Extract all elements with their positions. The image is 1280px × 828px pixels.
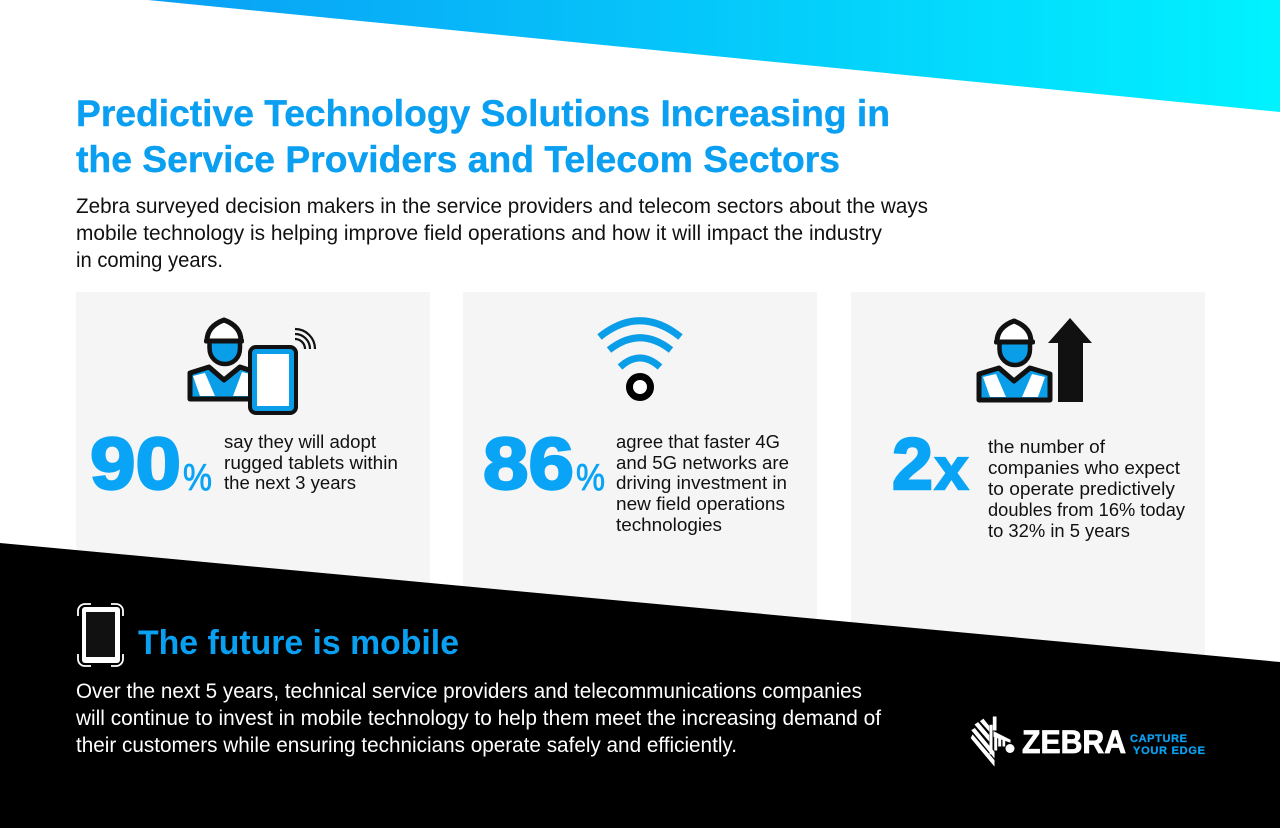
text: faster networks: and 5G networks are: [616, 452, 789, 473]
icon: mobile tablet: [78, 604, 123, 666]
text: adopt rugged tablets: [224, 431, 398, 493]
text: adopt rugged tablets: rugged tablets within: [224, 452, 398, 473]
panel: rugged tablets: [76, 292, 430, 592]
icon: worker with tablet: [190, 320, 315, 413]
title: the Service Providers and Telecom Sectors: [76, 139, 840, 180]
text: predictive doubling: the number of: [988, 436, 1106, 457]
intro paragraph: mobile technology is helping improve field operations and how it will impact the industry: [76, 222, 882, 245]
title: Predictive Technology Solutions Increasing in: [76, 93, 890, 134]
icon: wifi signal: [600, 321, 680, 398]
stat: 86%: 86: [483, 424, 574, 505]
text: faster networks: technologies: [616, 514, 722, 535]
closing paragraph: Over the next 5 years, technical service providers and telecommunications companies: [76, 680, 862, 703]
title: [76, 93, 890, 180]
text: predictive doubling: to 32% in 5 years: [988, 520, 1130, 541]
panel: 4G and 5G networks: [463, 292, 817, 632]
closing paragraph: [75, 680, 881, 757]
stat: 90%: 90: [90, 424, 181, 505]
stat: 86%: [483, 424, 605, 505]
text: predictive doubling: doubles from 16% today: [988, 499, 1186, 520]
stat: 90%: %: [183, 457, 212, 499]
intro paragraph: Zebra surveyed decision makers in the service providers and telecom sectors about the ways: [76, 195, 928, 218]
text: faster networks: new field operations: [616, 493, 785, 514]
intro paragraph: [76, 195, 928, 272]
logo wordmark: ZEBRA: [1022, 724, 1126, 760]
closing paragraph: will continue to invest in mobile technology to help them meet the increasing demand of: [75, 707, 881, 730]
heading: the future is mobile: The future is mobile: [138, 624, 459, 662]
zebra logo: [971, 717, 1205, 765]
icon: worker with up arrow: [979, 318, 1092, 402]
top gradient banner: [148, 0, 1280, 112]
stat: 86%: %: [576, 457, 605, 499]
stat: 2x: 2: [892, 424, 933, 505]
logo tagline: YOUR EDGE: [1133, 745, 1205, 757]
text: adopt rugged tablets: the next 3 years: [224, 472, 356, 493]
icon: zebra head mark: [971, 717, 1010, 765]
panel: operating predictively: [851, 292, 1205, 672]
text: adopt rugged tablets: say they will adopt: [224, 431, 376, 452]
black footer band: [0, 543, 1280, 828]
logo dot: [1006, 744, 1014, 753]
stat: 2x: x: [935, 437, 968, 502]
text: faster networks: agree that faster 4G: [616, 431, 780, 452]
closing paragraph: their customers while ensuring technicians operate safely and efficiently.: [76, 734, 737, 757]
intro paragraph: in coming years.: [76, 249, 223, 272]
text: predictive doubling: companies who expect: [988, 457, 1180, 478]
stat: 2x: [892, 424, 968, 505]
text: faster networks: [616, 431, 789, 535]
text: predictive doubling: to operate predictively: [988, 478, 1176, 499]
text: faster networks: driving investment in: [616, 472, 787, 493]
text: predictive doubling: [988, 436, 1186, 541]
logo tagline: [1130, 733, 1205, 757]
stat: 90%: [90, 424, 212, 505]
logo tagline: CAPTURE: [1130, 733, 1187, 745]
